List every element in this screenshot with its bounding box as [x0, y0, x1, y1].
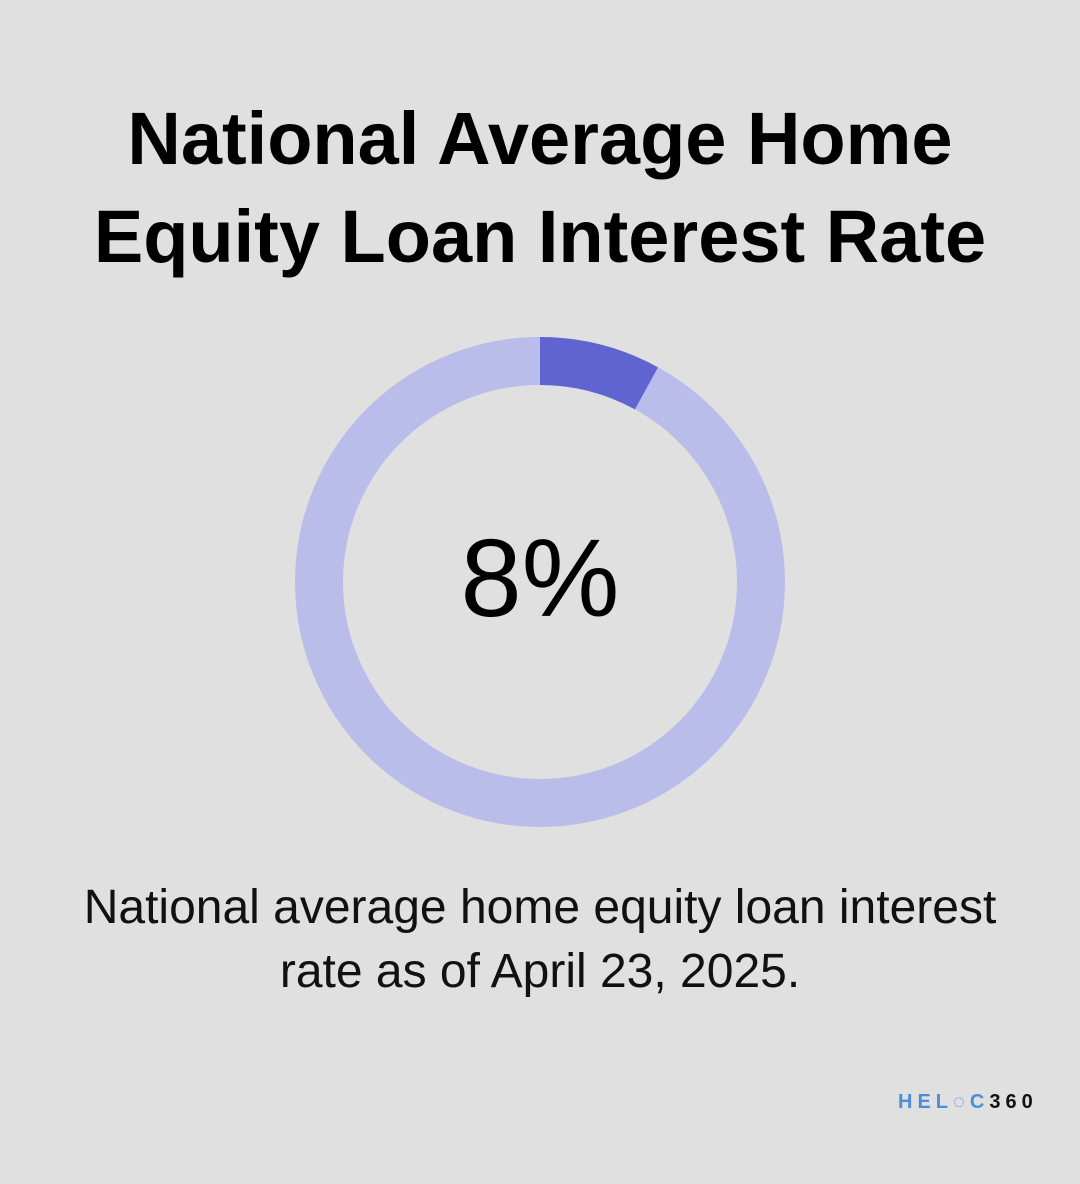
- description: [84, 881, 996, 998]
- description: rate as of April 23, 2025.: [280, 945, 800, 998]
- title: National Average Home: [127, 97, 953, 180]
- title: Equity Loan Interest Rate: [94, 195, 986, 278]
- description: National average home equity loan interest: [84, 881, 996, 934]
- donut chart: 8%: [461, 517, 619, 640]
- logo: HEL◌C360: [898, 1091, 1038, 1113]
- title: [94, 97, 986, 278]
